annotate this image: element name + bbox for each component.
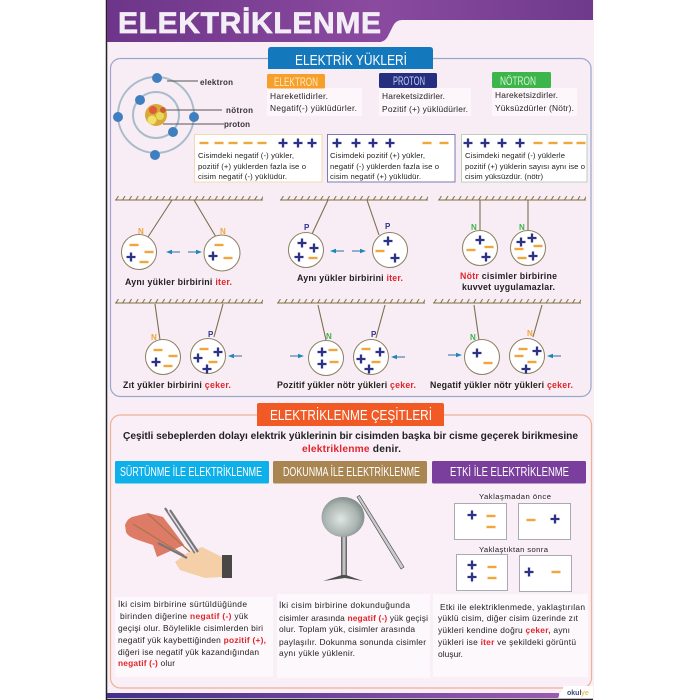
- logo: [558, 686, 593, 698]
- column header: contact: [273, 461, 427, 484]
- box: neutral: cisim yüksüzdür. (nötr): [465, 172, 543, 181]
- diagram: negative attracts neutral: N: [527, 329, 533, 338]
- box: neutral: [462, 134, 587, 182]
- text block: induction: [433, 594, 588, 677]
- text block: induction: yükleri kendine doğru çeker, aynı: [438, 625, 570, 635]
- text block: friction: İki cisim birbirine sürtüldüğünde: [118, 599, 247, 609]
- diagram: opposite charges attract: [115, 299, 263, 390]
- text block: friction: negatif (-) olur: [118, 658, 175, 668]
- icon: atom diagram: elektron: [200, 78, 233, 87]
- panel: types of electrification: [110, 403, 592, 688]
- diagram: two negative balls repel: Aynı yükler birbirini iter.: [125, 277, 232, 287]
- card: proton: Hareketsizdirler.: [382, 91, 445, 101]
- text block: contact: [277, 594, 430, 678]
- card: neutron: Hareketsizdirler.: [495, 90, 558, 100]
- diagram: negative attracts neutral: N: [470, 333, 476, 342]
- icon: atom diagram: nötron: [226, 106, 253, 115]
- box: positive charged: negatif (-) yüklerden fazla ise o: [330, 162, 439, 171]
- diagram: positive attracts neutral: N: [326, 332, 332, 341]
- text block: induction: yükleri ise iter ve şekildeki görüntü: [438, 637, 576, 647]
- heading: electric charges: [268, 47, 433, 69]
- box: positive charged: cisim negatif (+) yüklüdür.: [330, 172, 421, 181]
- text block: friction: geçişi olur. Böylelikle cisimlerden biri: [118, 623, 263, 633]
- intro text: Çeşitli sebeplerden dolayı elektrik yüklerinin bir cisimden başka bir cisme geçerek birikmesine: [123, 431, 578, 442]
- diagram: neutral balls: Nötr cisimler birbirine: [460, 271, 557, 281]
- column header: induction: ETKİ İLE ELEKTRİKLENME: [450, 465, 569, 479]
- poster frame: [106, 0, 593, 700]
- illustration: hand rubbing rod with cloth: [125, 508, 232, 578]
- column header: induction: [432, 461, 586, 484]
- text block: contact: paylaşılır. Dokunma sonunda cisimler: [279, 637, 426, 647]
- heading: types of electrification: [257, 403, 444, 426]
- logo: ye: [581, 690, 589, 697]
- diagram: two positive balls repel: [280, 196, 428, 283]
- text block: contact: olur. Toplam yük, cisimler arasında: [279, 624, 415, 634]
- text block: friction: birinden diğerine negatif (-) yük: [120, 611, 249, 621]
- diagram: two positive balls repel: P: [385, 222, 391, 231]
- diagram: neutral balls: N: [471, 223, 477, 232]
- intro text: [123, 431, 578, 455]
- illustration: electroscope with rod: [322, 496, 404, 581]
- diagram: two positive balls repel: Aynı yükler birbirini iter.: [297, 273, 403, 283]
- card: electron: Hareketlidirler.: [270, 91, 328, 101]
- box: positive charged: Cisimdeki pozitif (+) yükler,: [330, 151, 425, 160]
- logo: okul: [567, 690, 581, 697]
- diagram: negative attracts neutral: Negatif yükler nötr yükleri çeker.: [430, 380, 573, 390]
- illustration: induction boxes: Yaklaşmadan önce: [479, 492, 551, 501]
- heading: electric charges: ELEKTRİK YÜKLERİ: [295, 51, 407, 69]
- text block: friction: [115, 597, 273, 677]
- diagram: neutral balls: [438, 196, 586, 292]
- box: positive charged: [328, 134, 455, 182]
- box: negative charged: cisim negatif (-) yüklüdür.: [198, 172, 287, 181]
- card: neutron: [492, 72, 577, 116]
- card: electron: [267, 74, 362, 116]
- intro text: elektriklenme denir.: [302, 444, 401, 455]
- card: proton: PROTON: [393, 74, 425, 88]
- diagram: opposite charges attract: P: [208, 330, 214, 339]
- header banner: [107, 0, 593, 42]
- text block: friction: diğeri ise negatif yük kazandığından: [118, 647, 259, 657]
- text block: friction: negatif yük kaybettiğinden pozitif (+),: [118, 635, 266, 645]
- card: neutron: Yüksüzdürler (Nötr).: [495, 103, 574, 113]
- icon: atom diagram: [113, 73, 253, 160]
- text block: induction: Etki ile elektriklenmede, yaklaştırılan: [440, 602, 585, 612]
- column header: friction: SÜRTÜNME İLE ELEKTRİKLENME: [120, 465, 262, 479]
- box: negative charged: Cisimdeki negatif (-) yükler,: [198, 151, 294, 160]
- text block: contact: aynı yükle yüklenir.: [279, 648, 355, 658]
- icon: atom diagram: proton: [224, 120, 250, 129]
- diagram: opposite charges attract: Zıt yükler birbirini çeker.: [123, 380, 231, 390]
- diagram: neutral balls: kuvvet uygulamazlar.: [462, 282, 555, 292]
- text block: induction: yüklü cisim, diğer cisim üzerinde zıt: [438, 613, 579, 623]
- diagram: two positive balls repel: P: [304, 223, 310, 232]
- card: electron: Negatif(-) yüklüdürler.: [270, 103, 357, 113]
- diagram: two negative balls repel: N: [220, 227, 226, 236]
- box: neutral: Cisimdeki negatif (-) yüklerle: [465, 151, 565, 160]
- card: proton: [379, 73, 471, 116]
- illustration: induction boxes: Yaklaştıktan sonra: [479, 545, 549, 554]
- panel: electric charges: [110, 47, 591, 396]
- diagram: opposite charges attract: N: [151, 333, 157, 342]
- diagram: neutral balls: N: [519, 223, 525, 232]
- diagram: two negative balls repel: [115, 196, 263, 287]
- box: negative charged: pozitif (+) yüklerden fazla ise o: [198, 162, 306, 171]
- box: neutral: pozitif (+) yüklerin sayısı aynı ise o: [465, 162, 585, 171]
- column header: contact: DOKUNMA İLE ELEKTRİKLENME: [283, 465, 420, 479]
- card: proton: Pozitif (+) yüklüdürler.: [382, 104, 468, 114]
- text block: contact: cisimler arasında negatif (-) yük geçişi: [279, 613, 428, 623]
- diagram: positive attracts neutral: Pozitif yükler nötr yükleri çeker.: [277, 380, 416, 390]
- diagram: positive attracts neutral: P: [371, 330, 377, 339]
- column header: friction: [115, 461, 269, 484]
- diagram: two negative balls repel: N: [138, 227, 144, 236]
- diagram: positive attracts neutral: [277, 299, 425, 390]
- text block: contact: İki cisim birbirine dokunduğunda: [279, 600, 410, 610]
- text block: induction: oluşur.: [438, 649, 463, 659]
- box: negative charged: [194, 134, 322, 182]
- footer band: [107, 693, 559, 698]
- illustration: induction boxes: [454, 492, 572, 592]
- card: neutron: NÖTRON: [500, 74, 536, 88]
- diagram: negative attracts neutral: [430, 299, 581, 390]
- title: ELEKTRİKLENME: [118, 7, 381, 40]
- poster background: [106, 0, 594, 700]
- heading: types of electrification: ELEKTRİKLENME ÇEŞİTLERİ: [270, 406, 432, 424]
- card: electron: ELEKTRON: [274, 75, 318, 89]
